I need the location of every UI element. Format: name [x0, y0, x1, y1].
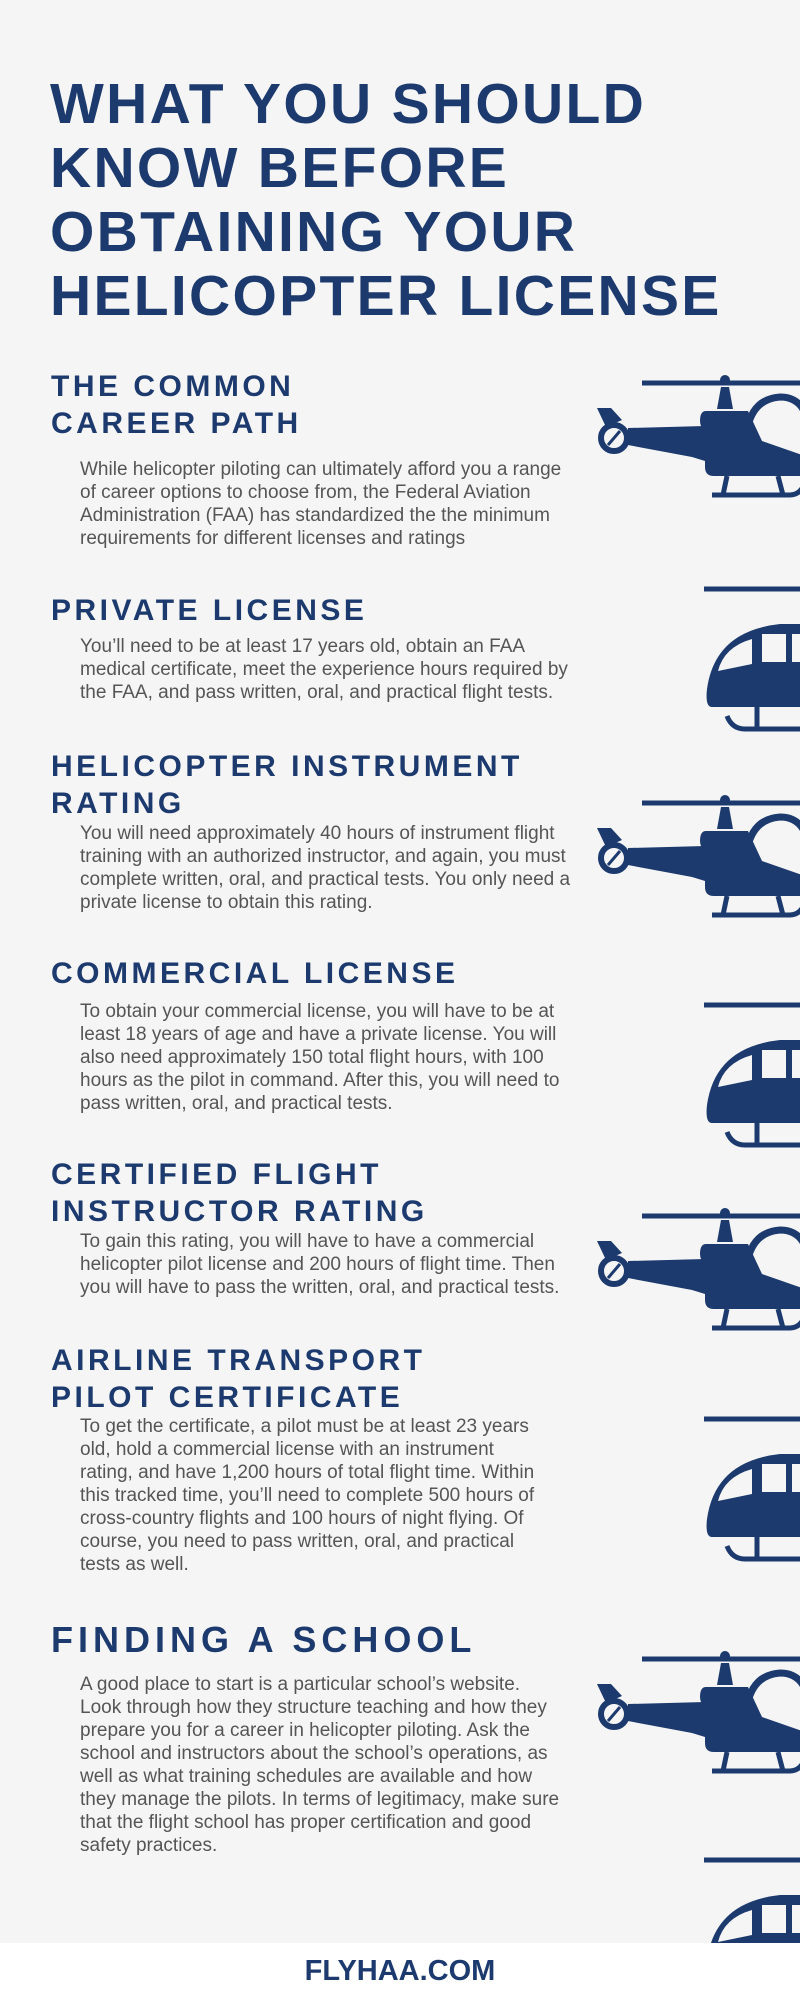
- icon: helicopter 5: [597, 1208, 800, 1328]
- title: OBTAINING YOUR: [50, 200, 577, 264]
- icon: helicopter 3: [597, 795, 800, 915]
- text: private license: You’ll need to be at least 17 years old, obtain an FAA medical certificate, meet the experience hours required by the FAA, and pass written, oral, and practical flight tests.: [80, 636, 568, 703]
- heading: instrument rating: RATING: [51, 787, 185, 820]
- heading: common career path: CAREER PATH: [51, 407, 302, 440]
- title: [50, 72, 722, 328]
- heading: cfi: [51, 1158, 428, 1228]
- icon: helicopter 2: [704, 586, 800, 729]
- text: cfi: To gain this rating, you will have to have a commercial helicopter pilot license and 200 hours of flight time. Then you will have to pass the written, oral, and practical tests.: [80, 1231, 559, 1298]
- heading: cfi: INSTRUCTOR RATING: [51, 1195, 428, 1228]
- title: WHAT YOU SHOULD: [50, 72, 646, 136]
- heading: atp: PILOT CERTIFICATE: [51, 1381, 403, 1414]
- heading: common career path: THE COMMON: [51, 370, 294, 403]
- heading: instrument rating: [51, 750, 523, 820]
- heading: instrument rating: HELICOPTER INSTRUMENT: [51, 750, 523, 783]
- text: finding a school: A good place to start is a particular school’s website. Look through how they structure teaching and how they prepare you for a career in helicopter piloting. Ask the school and instructors about the school’s operations, as well as what training schedules are available and how they manage the pilots. In terms of legitimacy, make sure that the flight school has proper certification and good safety practices.: [80, 1674, 559, 1856]
- text: atp: To get the certificate, a pilot must be at least 23 years old, hold a commercial license with an instrument rating, and have 1,200 hours of total flight time. Within this tracked time, you’ll need to complete 500 hours of cross-country flights and 100 hours of night flying. Of course, you need to pass written, oral, and practical tests as well.: [80, 1416, 534, 1575]
- text: common career path: While helicopter piloting can ultimately afford you a range of career options to choose from, the Federal Aviation Administration (FAA) has standardized the the minimum requirements for different licenses and ratings: [80, 459, 561, 549]
- heading: private license: PRIVATE LICENSE: [51, 594, 367, 627]
- title: KNOW BEFORE: [50, 136, 509, 200]
- icon: helicopter 1: [597, 375, 800, 495]
- heading: atp: [51, 1344, 426, 1414]
- text: commercial license: To obtain your commercial license, you will have to be at least 18 years of age and have a private license. You will also need approximately 150 total flight hours, with 100 hours as the pilot in command. After this, you will need to pass written, oral, and practical tests.: [80, 1001, 559, 1114]
- footer: [0, 1943, 800, 2000]
- icon: helicopter 7: [597, 1651, 800, 1771]
- icon: helicopter 4: [704, 1002, 800, 1145]
- heading: atp: AIRLINE TRANSPORT: [51, 1344, 426, 1377]
- footer: FLYHAA.COM: [305, 1955, 495, 1987]
- icon: helicopter 8: [704, 1858, 800, 2000]
- heading: finding a school: FINDING A SCHOOL: [51, 1619, 476, 1660]
- icon: helicopter 6: [704, 1416, 800, 1559]
- heading: commercial license: COMMERCIAL LICENSE: [51, 957, 458, 990]
- heading: cfi: CERTIFIED FLIGHT: [51, 1158, 382, 1191]
- title: HELICOPTER LICENSE: [50, 264, 722, 328]
- heading: common career path: [51, 370, 302, 440]
- text: instrument rating: You will need approximately 40 hours of instrument flight training with an authorized instructor, and again, you must complete written, oral, and practical tests. You only need a private license to obtain this rating.: [80, 823, 570, 913]
